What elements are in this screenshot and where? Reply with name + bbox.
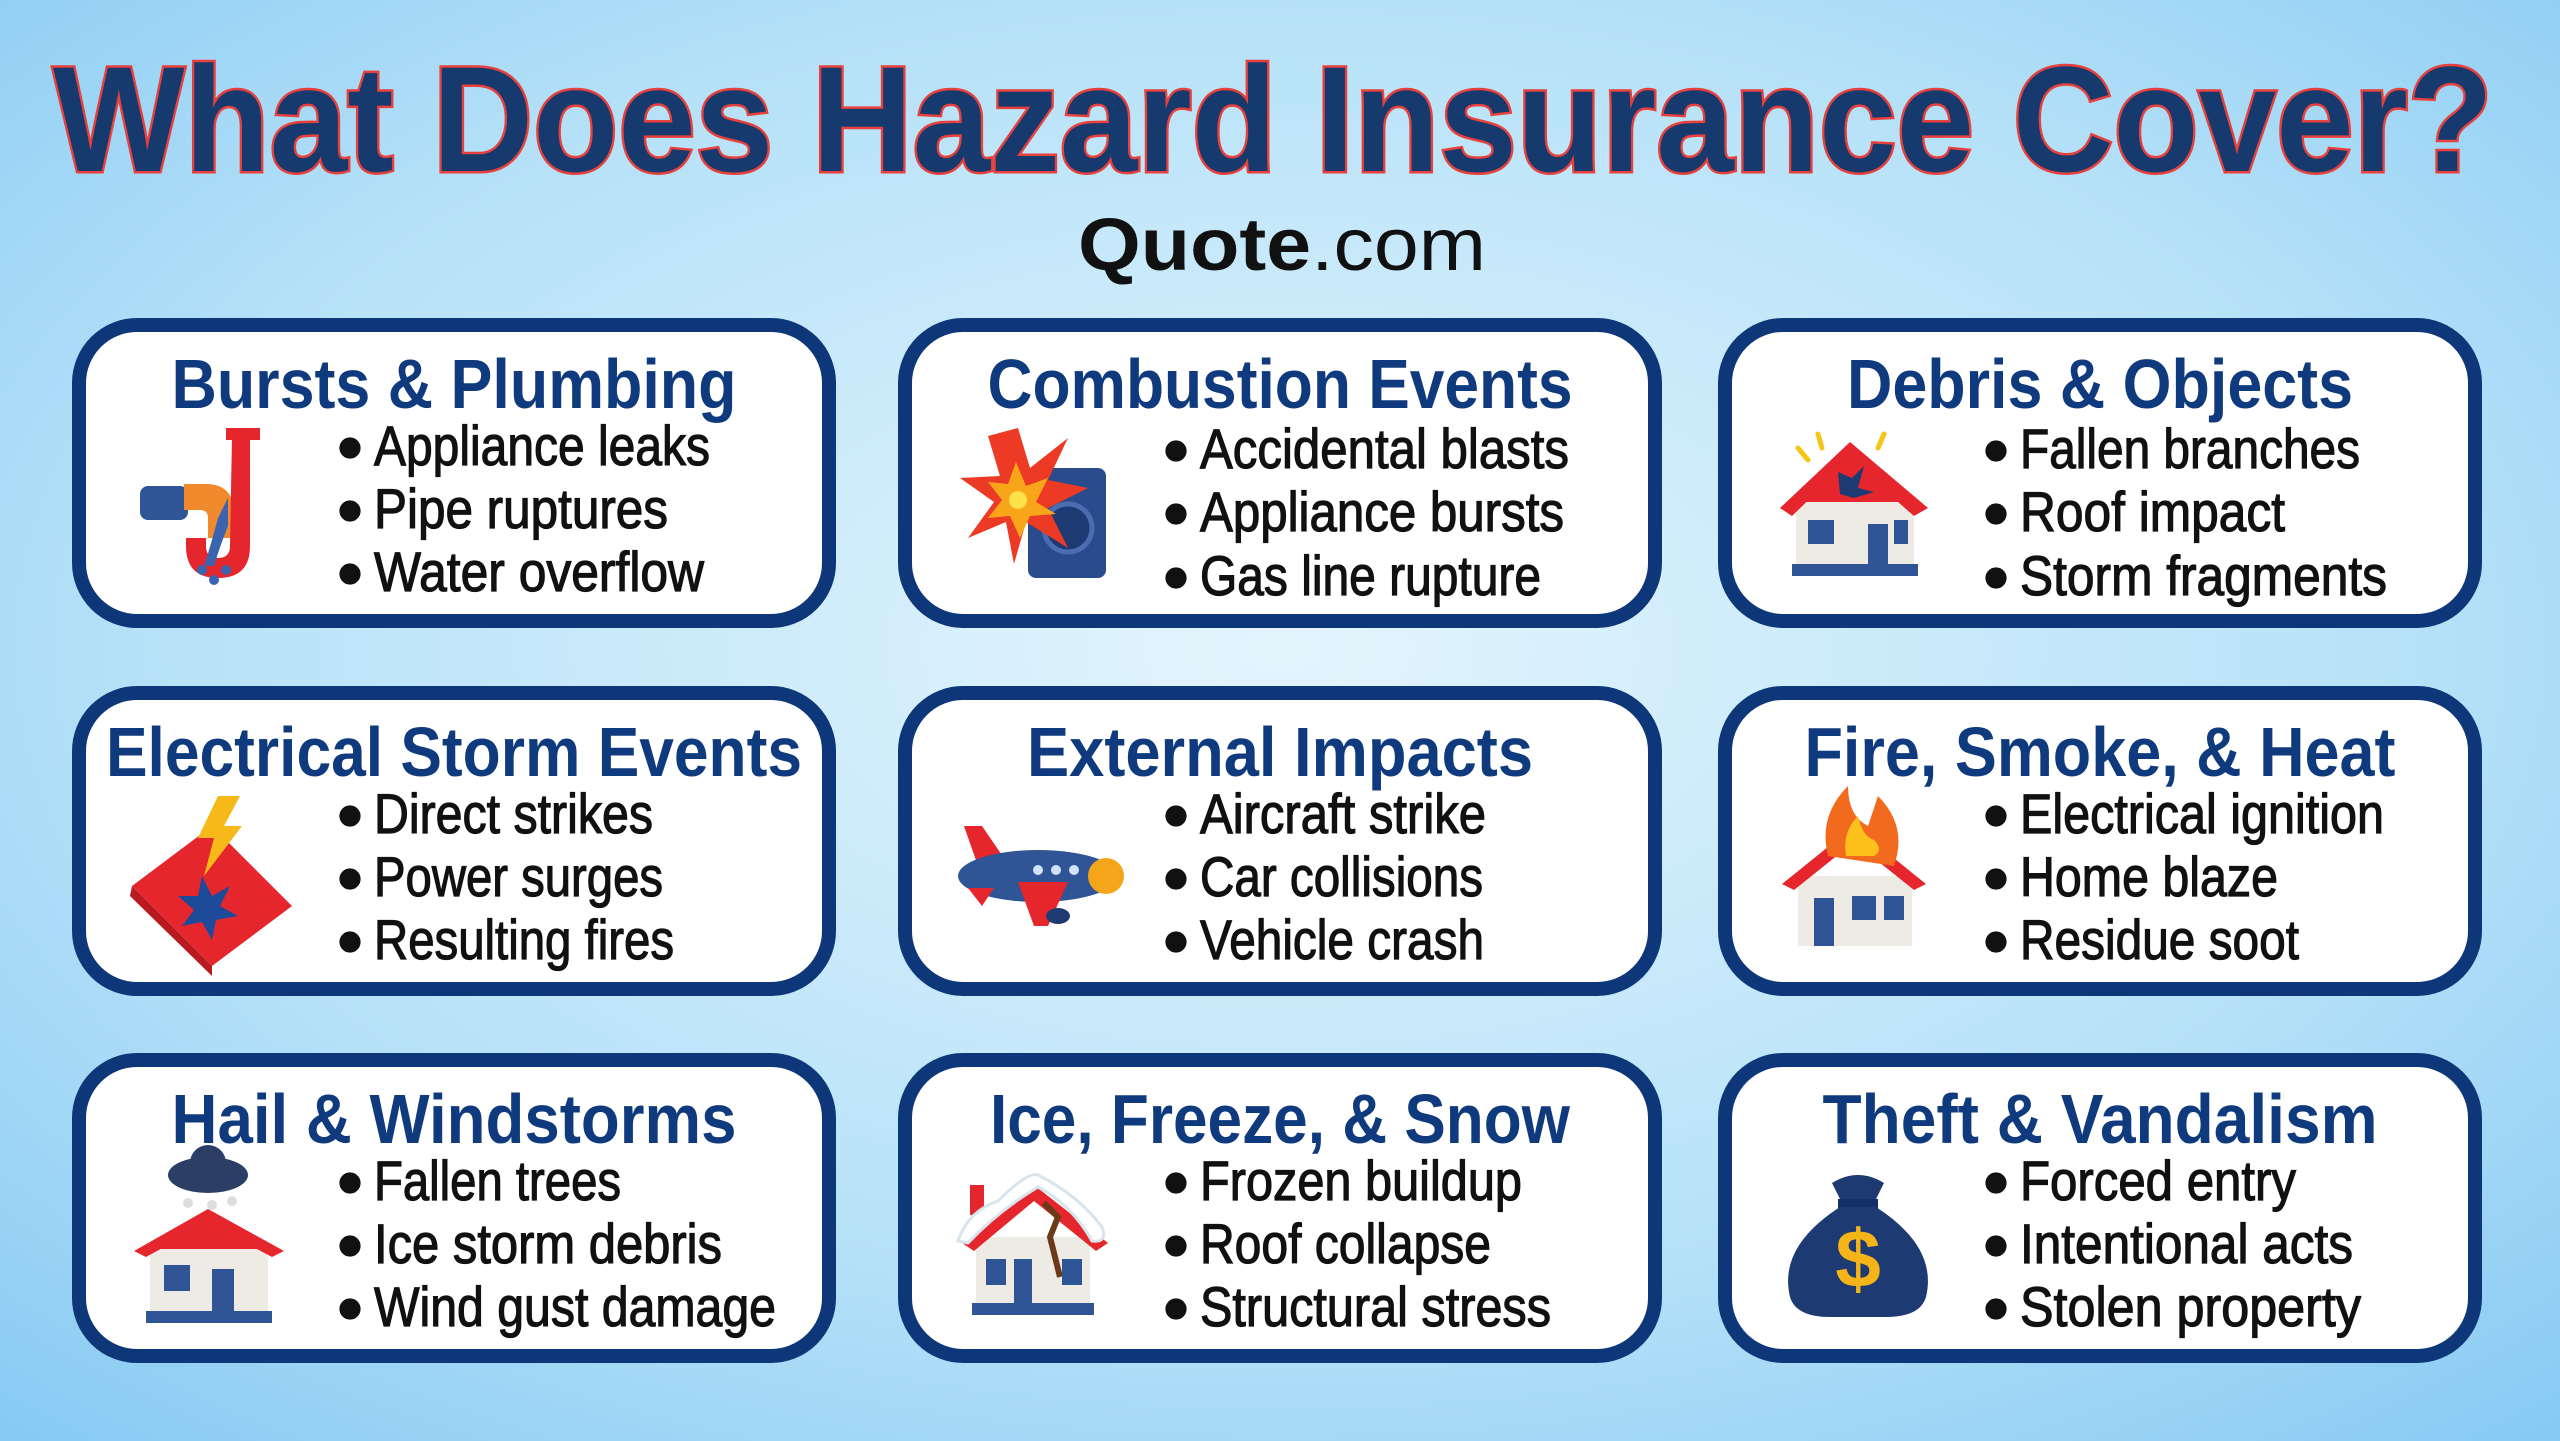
bullet list: Stolen property <box>2020 1275 2361 1338</box>
bullet list: Roof collapse <box>1200 1212 1491 1275</box>
bullet list: Resulting fires <box>374 908 674 971</box>
icon: airplane <box>958 826 1124 926</box>
bullet list <box>340 782 674 971</box>
bullet list <box>340 1149 776 1338</box>
panel: Hail & Windstorms <box>79 1060 829 1356</box>
icon: snowy collapsed house <box>958 1175 1108 1315</box>
heading: Bursts & Plumbing <box>172 345 736 423</box>
icon: storm cloud over house <box>134 1145 284 1323</box>
bullet list <box>1986 1149 2361 1338</box>
heading: Electrical Storm Events <box>106 713 802 791</box>
bullet list: Wind gust damage <box>374 1275 776 1338</box>
icon: explosion and appliance <box>960 428 1106 578</box>
heading: Fire, Smoke, & Heat <box>1804 713 2396 791</box>
heading: Theft & Vandalism <box>1822 1080 2378 1158</box>
icon: damaged house <box>1780 434 1928 576</box>
bullet list: Home blaze <box>2020 845 2278 908</box>
bullet list: Gas line rupture <box>1200 544 1541 607</box>
bullet list: Roof impact <box>2020 480 2285 543</box>
bullet list <box>340 414 710 603</box>
bullet list: Pipe ruptures <box>374 477 668 540</box>
bullet list: Storm fragments <box>2020 544 2387 607</box>
bullet list: Vehicle crash <box>1200 908 1484 971</box>
bullet list: Direct strikes <box>374 782 653 845</box>
bullet list: Ice storm debris <box>374 1212 722 1275</box>
heading: External Impacts <box>1027 713 1533 791</box>
icon: money bag: $ <box>1835 1214 1881 1305</box>
bullet list <box>1166 417 1569 607</box>
bullet list: Fallen branches <box>2020 417 2360 480</box>
bullet list <box>1986 782 2384 971</box>
panel: Theft & Vandalism <box>1725 1060 2475 1356</box>
icon: lightning on roof <box>130 796 292 976</box>
bullet list: Water overflow <box>374 540 704 603</box>
bullet list: Aircraft strike <box>1200 782 1486 845</box>
bullet list: Accidental blasts <box>1200 417 1569 480</box>
bullet list <box>1986 417 2387 607</box>
bullet list <box>1166 782 1486 971</box>
bullet list: Frozen buildup <box>1200 1149 1522 1212</box>
icon: house on fire <box>1782 786 1926 946</box>
bullet list <box>1166 1149 1551 1338</box>
panel: Fire, Smoke, & Heat <box>1725 693 2475 989</box>
bullet list: Appliance leaks <box>374 414 710 477</box>
bullet list: Power surges <box>374 845 663 908</box>
icon: burst pipe <box>140 428 260 585</box>
bullet list: Electrical ignition <box>2020 782 2384 845</box>
bullet list: Fallen trees <box>374 1149 621 1212</box>
panel: Ice, Freeze, & Snow <box>905 1060 1655 1356</box>
bullet list: Appliance bursts <box>1200 480 1564 543</box>
panel: Bursts & Plumbing <box>79 325 829 621</box>
panel: Electrical Storm Events <box>79 693 829 989</box>
heading: Debris & Objects <box>1847 345 2353 423</box>
heading: Combustion Events <box>988 345 1572 423</box>
heading: Ice, Freeze, & Snow <box>990 1080 1570 1158</box>
bullet list: Forced entry <box>2020 1149 2296 1212</box>
panel: Combustion Events <box>905 325 1655 621</box>
panel: Debris & Objects <box>1725 325 2475 621</box>
heading: Hail & Windstorms <box>172 1080 736 1158</box>
bullet list: Structural stress <box>1200 1275 1551 1338</box>
panel: External Impacts <box>905 693 1655 989</box>
bullet list: Residue soot <box>2020 908 2299 971</box>
bullet list: Car collisions <box>1200 845 1483 908</box>
bullet list: Intentional acts <box>2020 1212 2353 1275</box>
logo: Quote.com: Quote .com <box>1078 203 1486 286</box>
icon: money bag <box>1788 1175 1928 1317</box>
